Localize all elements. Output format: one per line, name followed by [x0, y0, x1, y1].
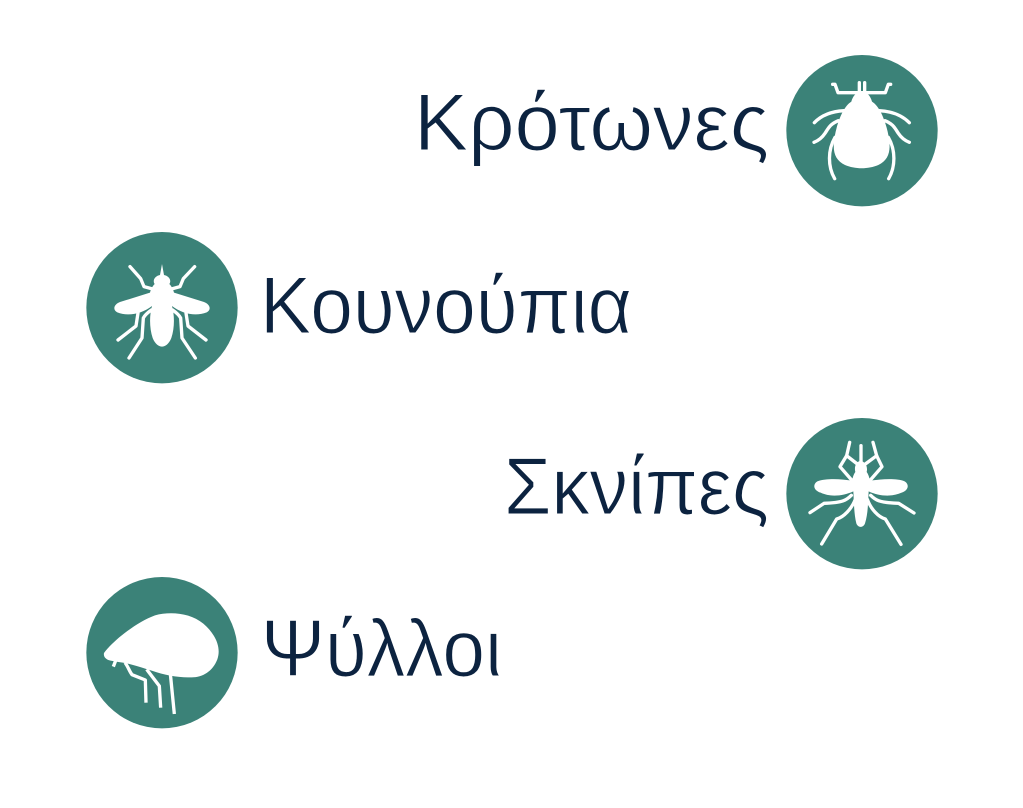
icon: flea	[86, 577, 238, 728]
icon: tick	[786, 55, 938, 206]
label: Κουνούπια (mosquitoes): Κουνούπια	[260, 261, 632, 351]
label: Ψύλλοι (fleas): Ψύλλοι	[261, 604, 502, 694]
label: Κρότωνες (ticks): Κρότωνες	[414, 78, 769, 168]
icon: gnat	[786, 418, 938, 569]
icon: mosquito	[86, 232, 238, 383]
label: Σκνίπες (gnats): Σκνίπες	[504, 442, 769, 532]
